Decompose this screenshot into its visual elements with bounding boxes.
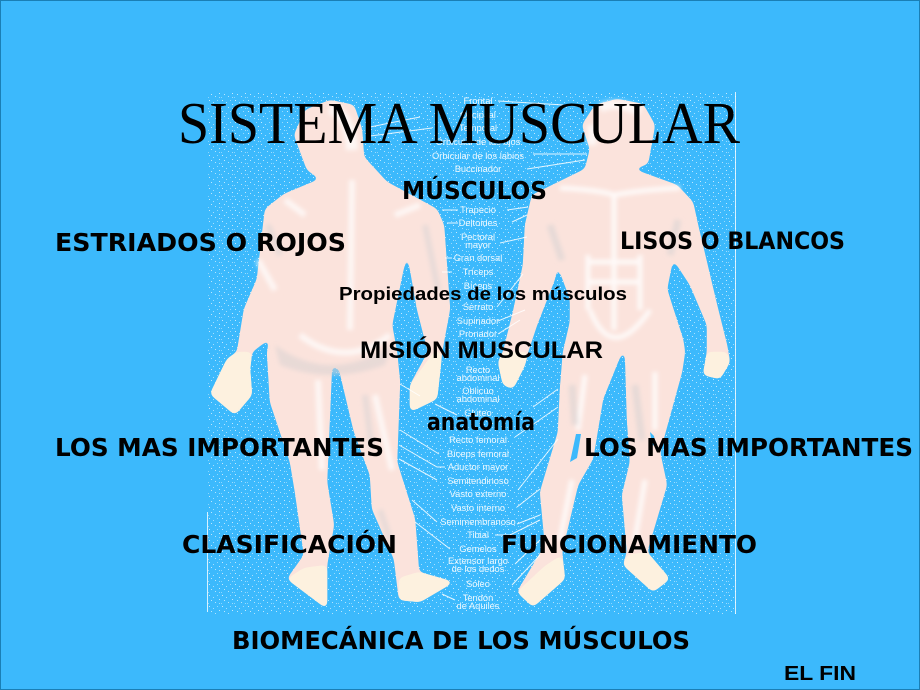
muscle name labels: Tendón bbox=[463, 593, 493, 603]
muscle name labels: Tibial bbox=[467, 530, 489, 540]
front figure muscle detail bbox=[550, 105, 680, 540]
muscle name labels: Gran dorsal bbox=[454, 253, 502, 263]
muscle name labels: Trapecio bbox=[460, 205, 496, 215]
muscle name labels: Recto bbox=[466, 365, 490, 375]
muscle name labels: Vasto externo bbox=[450, 489, 506, 499]
muscle name labels: Orbicular de los ojos bbox=[436, 137, 521, 147]
muscle name labels: Oblicuo bbox=[462, 386, 494, 396]
muscle name labels: Glúteo bbox=[464, 408, 492, 418]
muscle name labels: abdominal bbox=[457, 394, 499, 404]
front figure knee gaps bbox=[570, 432, 656, 462]
muscle name labels: Buccinador bbox=[455, 164, 501, 174]
title: SISTEMA MUSCULAR bbox=[178, 90, 741, 156]
muscle name labels: Sóleo bbox=[466, 579, 490, 589]
label: anatomía: anatomía bbox=[427, 408, 535, 436]
muscle name labels: Tríceps bbox=[463, 267, 494, 277]
muscle name labels: Pronador bbox=[459, 329, 497, 339]
muscle name labels bbox=[432, 96, 524, 611]
back figure hands and feet bbox=[210, 352, 454, 609]
muscle name labels: Aductor mayor bbox=[448, 462, 508, 472]
muscle name labels: Orbicular de los labios bbox=[432, 151, 524, 161]
stippled picture background bbox=[207, 92, 736, 614]
muscle name labels: Frontal bbox=[464, 96, 492, 106]
muscle name labels: Gemelos bbox=[459, 544, 497, 554]
muscle name labels: Vasto interno bbox=[451, 503, 505, 513]
label: propiedades de los músculos: Propiedades de los músculos bbox=[339, 284, 627, 304]
muscle name labels: Serrato bbox=[463, 302, 493, 312]
muscle name labels: Pectoral bbox=[461, 232, 495, 242]
muscle name labels: mayor bbox=[465, 240, 491, 250]
muscle name labels: Recto femoral bbox=[449, 435, 507, 445]
label: lisos o blancos: LISOS O BLANCOS bbox=[620, 227, 845, 255]
muscle name labels: Deltoides bbox=[459, 218, 498, 228]
label: estriados o rojos: ESTRIADOS O ROJOS bbox=[55, 228, 346, 257]
back view body figure bbox=[210, 100, 454, 609]
front figure hands and feet bbox=[498, 352, 730, 607]
muscle name labels: de Aquiles bbox=[457, 601, 500, 611]
heading: músculos: MÚSCULOS bbox=[402, 175, 547, 205]
front view body figure bbox=[498, 99, 730, 607]
muscle name labels: Temporal bbox=[459, 123, 497, 133]
muscle name labels: Bíceps femoral bbox=[447, 449, 509, 459]
label: los mas importantes right: LOS MAS IMPORTANTES bbox=[584, 433, 913, 462]
label: clasificación: CLASIFICACIÓN bbox=[182, 529, 397, 559]
muscle name labels: Bíceps bbox=[464, 281, 493, 291]
label: los mas importantes left: LOS MAS IMPORTANTES bbox=[55, 433, 384, 462]
muscle name labels: Extensor largo bbox=[448, 556, 508, 566]
label: biomecánica de los músculos: BIOMECÁNICA DE LOS MÚSCULOS bbox=[232, 625, 690, 655]
muscle name labels: abdominal bbox=[457, 373, 499, 383]
muscle name labels: Supinador bbox=[457, 316, 499, 326]
muscle name labels: de los dedos bbox=[452, 564, 505, 574]
label: misión muscular: MISIÓN MUSCULAR bbox=[360, 336, 603, 364]
muscle name labels: Semitendinoso bbox=[447, 476, 509, 486]
label: el fin: EL FIN bbox=[784, 663, 856, 685]
muscle leader lines bbox=[370, 101, 587, 600]
muscle name labels: Semimembranoso bbox=[440, 517, 516, 527]
label: funcionamiento: FUNCIONAMIENTO bbox=[501, 530, 757, 559]
muscle name labels: Occipital bbox=[460, 110, 496, 120]
back figure muscle shading bbox=[258, 108, 438, 545]
anatomy illustration panel bbox=[207, 92, 736, 614]
